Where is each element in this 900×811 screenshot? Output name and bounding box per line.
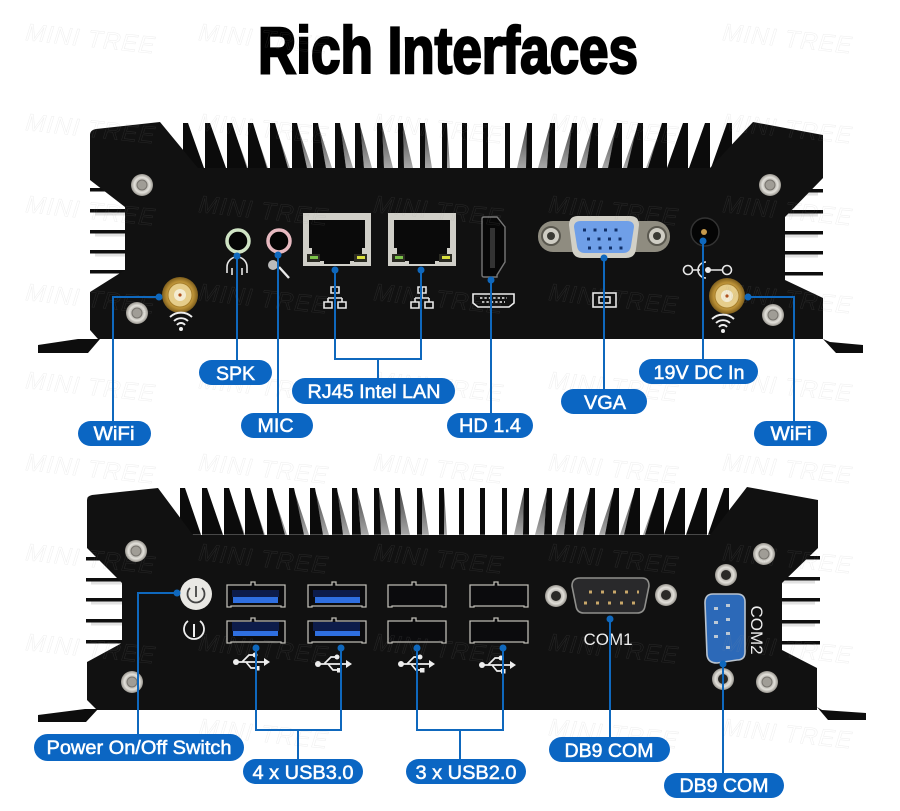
callout: DB9 COM for COM1: DB9 COM xyxy=(564,741,654,762)
screws, top unit xyxy=(126,174,784,326)
callout: 3 x USB2.0: 3 x USB2.0 xyxy=(416,763,516,784)
panel: rear device with audio, LAN and video ports xyxy=(38,122,863,353)
side fins, bottom unit xyxy=(86,556,820,644)
panel: front device with USB and serial ports xyxy=(38,487,866,722)
speaker jack xyxy=(227,230,249,275)
chassis, top unit xyxy=(90,122,823,339)
watermark: MINI TREE xyxy=(372,629,505,670)
screws, bottom unit xyxy=(121,540,778,693)
watermark: MINI TREE xyxy=(197,367,330,408)
callout: 19V DC In xyxy=(639,238,758,384)
callout: VGA xyxy=(561,254,647,414)
watermark: MINI TREE xyxy=(547,191,680,232)
HDMI port xyxy=(473,217,514,307)
callout: 4 x USB3.0 xyxy=(243,644,363,784)
power button xyxy=(180,578,212,639)
watermark: MINI TREE xyxy=(24,367,157,408)
LAN port 2 xyxy=(388,213,456,266)
watermark: MINI TREE xyxy=(547,367,680,408)
USB 3.0 ports xyxy=(227,582,366,643)
watermark: MINI TREE xyxy=(721,449,854,490)
watermark: MINI TREE xyxy=(24,279,157,320)
watermark: MINI TREE xyxy=(547,109,680,150)
LAN port 1 xyxy=(303,213,371,266)
title: Rich Interfaces xyxy=(258,13,638,87)
watermark: MINI TREE xyxy=(721,279,854,320)
feet, top unit xyxy=(38,339,863,353)
callout: HD 1.4 xyxy=(447,276,533,438)
VGA port xyxy=(538,216,670,307)
watermark: MINI TREE xyxy=(24,19,157,60)
heat sink fins, bottom unit xyxy=(180,488,729,535)
callout: DB9 COM for COM1 xyxy=(549,616,670,762)
callout: SPK: SPK xyxy=(216,364,255,385)
watermark: MINI TREE xyxy=(547,629,680,670)
callout: MIC xyxy=(241,252,313,438)
watermark: MINI TREE xyxy=(721,539,854,580)
watermark: MINI TREE xyxy=(721,367,854,408)
callout: 19V DC In: 19V DC In xyxy=(654,363,744,384)
callout: Power On/Off Switch xyxy=(34,590,244,761)
watermark: MINI TREE xyxy=(197,191,330,232)
watermark: MINI TREE xyxy=(721,714,854,755)
callout: VGA: VGA xyxy=(584,393,626,414)
watermark: MINI TREE xyxy=(372,279,505,320)
callout: WiFi right xyxy=(744,294,827,446)
callout: RJ45 Intel LAN xyxy=(292,266,455,404)
callout: 4 x USB3.0: 4 x USB3.0 xyxy=(252,763,354,784)
callout: WiFi right: WiFi xyxy=(770,424,812,445)
watermark: MINI TREE xyxy=(197,109,330,150)
watermark: MINI TREE xyxy=(721,191,854,232)
callout: SPK xyxy=(199,252,272,385)
DC power jack xyxy=(684,218,732,278)
watermark: MINI TREE xyxy=(372,367,505,408)
USB 2.0 ports xyxy=(388,582,528,643)
callout: HD 1.4: HD 1.4 xyxy=(459,416,521,437)
watermark: MINI TREE xyxy=(24,191,157,232)
watermark: MINI TREE xyxy=(197,449,330,490)
microphone jack xyxy=(268,230,290,278)
COM2 serial port xyxy=(705,564,766,690)
callout: DB9 COM for COM2: DB9 COM xyxy=(680,776,768,797)
watermark: MINI TREE xyxy=(24,109,157,150)
watermark: MINI TREE xyxy=(721,19,854,60)
watermark: MINI TREE xyxy=(197,539,330,580)
LAN icons xyxy=(324,287,433,308)
watermark: MINI TREE xyxy=(197,714,330,755)
USB icons xyxy=(233,652,516,674)
callout: RJ45 Intel LAN: RJ45 Intel LAN xyxy=(308,382,440,403)
watermark: MINI TREE xyxy=(24,449,157,490)
callout: Power On/Off Switch: Power On/Off Switch xyxy=(46,738,232,759)
watermark: MINI TREE xyxy=(372,191,505,232)
watermark: MINI TREE xyxy=(197,19,330,60)
callout: WiFi left: WiFi xyxy=(94,424,134,445)
feet, bottom unit xyxy=(38,707,866,722)
side fins, top unit xyxy=(90,188,823,276)
watermark: MINI TREE xyxy=(197,629,330,670)
heat sink fins, top unit xyxy=(183,123,732,168)
watermark: MINI TREE xyxy=(372,449,505,490)
COM2 serial port: COM2 xyxy=(747,605,766,655)
watermark: MINI TREE xyxy=(197,279,330,320)
watermark: MINI TREE xyxy=(372,109,505,150)
COM1 serial port: COM1 xyxy=(583,630,633,649)
watermark: MINI TREE xyxy=(547,539,680,580)
watermark: MINI TREE xyxy=(547,279,680,320)
watermark: MINI TREE xyxy=(721,629,854,670)
watermark: MINI TREE xyxy=(721,109,854,150)
watermark: MINI TREE xyxy=(547,714,680,755)
callout: WiFi left xyxy=(78,294,162,446)
watermark: MINI TREE xyxy=(24,539,157,580)
callout: 3 x USB2.0 xyxy=(406,644,526,784)
chassis, bottom unit xyxy=(87,487,818,710)
callout: DB9 COM for COM2 xyxy=(664,660,784,798)
antenna connector left xyxy=(162,277,198,331)
callout: MIC: MIC xyxy=(258,416,294,437)
watermark: MINI TREE xyxy=(24,629,157,670)
watermark: MINI TREE xyxy=(547,449,680,490)
antenna connector right xyxy=(709,278,745,333)
watermark: MINI TREE xyxy=(372,539,505,580)
COM1 serial port xyxy=(545,578,677,649)
